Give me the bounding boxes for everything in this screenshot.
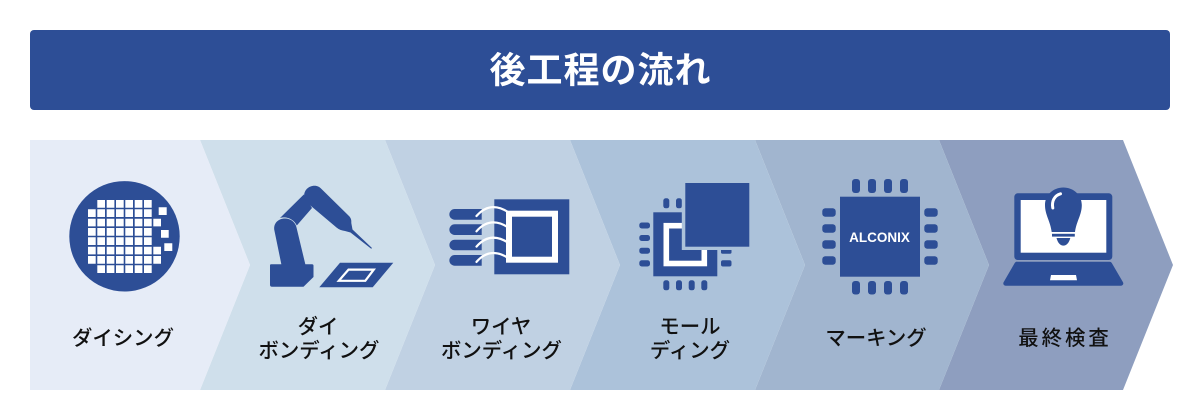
title: 後工程の流れ <box>489 50 712 90</box>
chevron 4 <box>570 140 805 390</box>
icon: marked chip <box>822 179 938 294</box>
label: molding <box>650 316 730 362</box>
chevron 1 <box>30 140 250 390</box>
chevron 6 <box>939 140 1173 390</box>
label: dicing: ダイシング <box>72 327 174 350</box>
chip marking: ALCONIX <box>849 230 910 245</box>
icon: molding <box>639 180 753 290</box>
icon: robot arm die bonding <box>270 186 393 287</box>
process flow chevrons <box>30 140 1173 390</box>
icon: laptop with light bulb <box>1003 188 1123 286</box>
label: molding: ディング <box>650 338 730 362</box>
label: wire bonding: ワイヤ <box>471 316 531 338</box>
chevron 2 <box>200 140 435 390</box>
label: die bonding: ボンディング <box>259 338 379 362</box>
label: wire bonding <box>441 316 562 362</box>
label: marking: マーキング <box>825 327 927 350</box>
label: die bonding: ダイ <box>298 316 338 338</box>
icon: wire bonding <box>449 199 569 274</box>
chevron 3 <box>385 140 620 390</box>
label: wire bonding: ボンディング <box>441 338 562 362</box>
label: final inspection: 最終検査 <box>1018 327 1112 350</box>
chevron 5 <box>755 140 989 390</box>
title banner <box>30 30 1170 110</box>
label: die bonding <box>259 316 379 362</box>
icon: wafer <box>69 181 180 292</box>
label: molding: モール <box>659 316 721 338</box>
